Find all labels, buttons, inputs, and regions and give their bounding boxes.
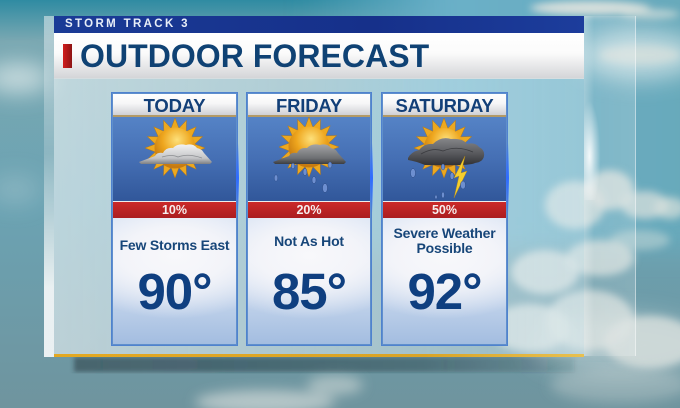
- temperature: 92°: [407, 263, 482, 320]
- card: Saturday: [381, 92, 508, 346]
- card edge glow: [236, 143, 239, 213]
- glass light flare: [584, 90, 606, 200]
- rain chance: 20%: [296, 203, 322, 217]
- weather icon: sun with cloud: [113, 117, 236, 201]
- rain chance: [113, 201, 236, 218]
- outlook text: Severe Weather: [393, 225, 496, 241]
- red title accent: [63, 44, 72, 68]
- right glass strip: [584, 16, 636, 356]
- rain chance: [248, 201, 370, 218]
- header bar: Storm Track 3: STORM TRACK 3: [65, 18, 190, 30]
- rain chance: 50%: [432, 203, 457, 217]
- card edge glow: [506, 143, 509, 213]
- outlook text: Possible: [416, 240, 472, 256]
- weather icon: sun, grey cloud and rain: [248, 117, 370, 201]
- card edge glow: [370, 143, 373, 213]
- title: OUTDOOR FORECAST: [80, 38, 429, 74]
- panel: translucent forecast board: [54, 78, 584, 355]
- temperature: 85°: [272, 263, 346, 320]
- outlook text: Few Storms East: [120, 237, 229, 253]
- rain chance: [383, 201, 506, 218]
- header bar: Storm Track 3: [54, 16, 584, 33]
- day label: [113, 94, 236, 117]
- card: Friday: [246, 92, 372, 346]
- sky clouds: [490, 1, 680, 368]
- rain chance: 10%: [162, 203, 187, 217]
- day label: [248, 94, 370, 117]
- day label: TODAY: [144, 95, 205, 116]
- gold base line: [54, 354, 584, 357]
- left glass strip: [44, 16, 54, 357]
- outlook text: [393, 225, 496, 256]
- weather icon: storm cloud, sun and lightning: [383, 117, 506, 201]
- outlook text: Not As Hot: [274, 233, 344, 249]
- temperature: 90°: [137, 263, 212, 320]
- day label: SATURDAY: [395, 95, 494, 116]
- title bar: [54, 33, 584, 79]
- card: Today: [111, 92, 238, 346]
- day label: FRIDAY: [276, 95, 342, 116]
